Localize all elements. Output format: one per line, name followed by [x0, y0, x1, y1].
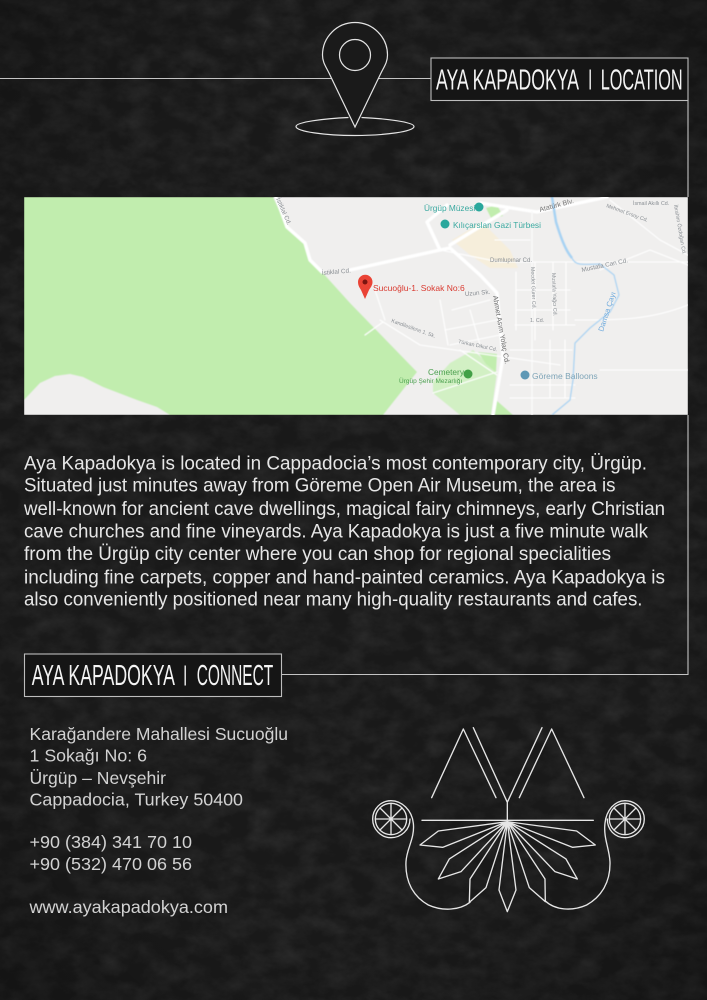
- map: labels: İbrahim Özdoğan Cd.: [672, 204, 688, 255]
- text block: address: Cappadocia, Turkey 50400: [30, 790, 243, 810]
- map panel: Cemetery: [428, 367, 465, 377]
- heading: connect: [24, 654, 282, 696]
- map: labels: Mustafa Yağcı Cd.: [550, 273, 558, 316]
- logo: fan of petals: [420, 822, 595, 912]
- logo: mountain letters: [422, 728, 593, 821]
- map: labels: Uzun Sk.: [465, 289, 491, 298]
- text block: website: www.ayakapadokya.com: [28, 897, 228, 917]
- map: large green park: [24, 197, 417, 415]
- text block: location description: Aya Kapadokya is located in Cappadocia’s most contemporary city, Ürgüp.: [24, 453, 647, 474]
- map: labels: Atatürk Blv.: [539, 198, 575, 214]
- map: labels: Mehmet Ersoy Cd.: [605, 203, 649, 224]
- text block: address: 1 Sokağı No: 6: [30, 746, 147, 766]
- map: labels: Damsa Çayı: [596, 291, 618, 333]
- text block: location description: [23, 453, 665, 611]
- logo: right wheel: [609, 803, 641, 835]
- map: labels: [274, 196, 688, 365]
- map: labels: Kandilesilene 1. Sk.: [390, 318, 436, 340]
- text block: address: Karağandere Mahallesi Sucuoğlu: [30, 724, 288, 744]
- map: red marker: [358, 275, 372, 299]
- heading: connect: AYA KAPADOKYA: [32, 660, 175, 692]
- text block: location description: also conveniently positioned near many high-quality restaurants and cafes.: [24, 590, 642, 611]
- map: river: [552, 258, 619, 415]
- logo: left wheel: [375, 803, 407, 835]
- map: cemetery parks: [433, 350, 497, 415]
- logo: left scroll: [373, 801, 470, 909]
- map: roads: [276, 197, 607, 415]
- text block: phone numbers: [30, 832, 192, 874]
- map: city centre tint: [452, 222, 518, 268]
- map: labels: 1. Cd.: [530, 318, 544, 324]
- heading: location: [431, 58, 688, 100]
- text block: location description: including fine carpets, copper and hand-painted ceramics. Aya Kapadokya is: [24, 567, 665, 588]
- map: labels: İsmail Akıllı Cd.: [633, 200, 669, 207]
- map: labels: Ahmet Asım Yolaç Cd.: [491, 295, 510, 365]
- text block: address: [30, 724, 288, 810]
- heading: connect: CONNECT: [197, 660, 273, 692]
- map panel: Ürgüp Şehir Mezarlığı: [399, 377, 462, 385]
- text block: phone numbers: +90 (384) 341 70 10: [30, 832, 192, 852]
- map: points of interest: Ürgüp Müzesi: [424, 203, 475, 213]
- map: labels: Mustafa Can Cd.: [581, 257, 629, 274]
- map: labels: Dumlupınar Cd.: [490, 258, 532, 264]
- map panel: [24, 196, 690, 415]
- map: labels: Türkan Dikut Cd.: [458, 339, 498, 353]
- text block: location description: cave churches and fine vineyards. Aya Kapadokya is just a five minute walk: [24, 521, 648, 542]
- text block: address: Ürgüp – Nevşehir: [30, 768, 166, 788]
- frame connector lines: [0, 78, 688, 674]
- heading: location: AYA KAPADOKYA: [436, 64, 579, 96]
- map: labels: İstiklal Cd.: [274, 196, 294, 227]
- text block: location description: from the Ürgüp city center where you can shop for regional specialities: [24, 544, 611, 565]
- map panel: Kılıçarslan Gazi Türbesi: [453, 220, 541, 230]
- text block: location description: Situated just minutes away from Göreme Open Air Museum, the area is: [24, 476, 616, 497]
- map: labels: Mecdet Gürer Cd.: [529, 267, 536, 309]
- map panel: Göreme Balloons: [532, 371, 598, 381]
- map: labels: İstiklal Cd.: [321, 265, 351, 277]
- logo: right scroll: [545, 801, 644, 909]
- logo: Aya Kapadokya emblem: [373, 728, 644, 912]
- text block: phone numbers: +90 (532) 470 06 56: [30, 854, 192, 874]
- text block: location description: well-known for ancient cave dwellings, magical fairy chimneys, early Christian: [23, 499, 665, 520]
- icon: location pin: [296, 22, 414, 136]
- map panel: Sucuoğlu-1. Sokak No:6: [373, 283, 465, 293]
